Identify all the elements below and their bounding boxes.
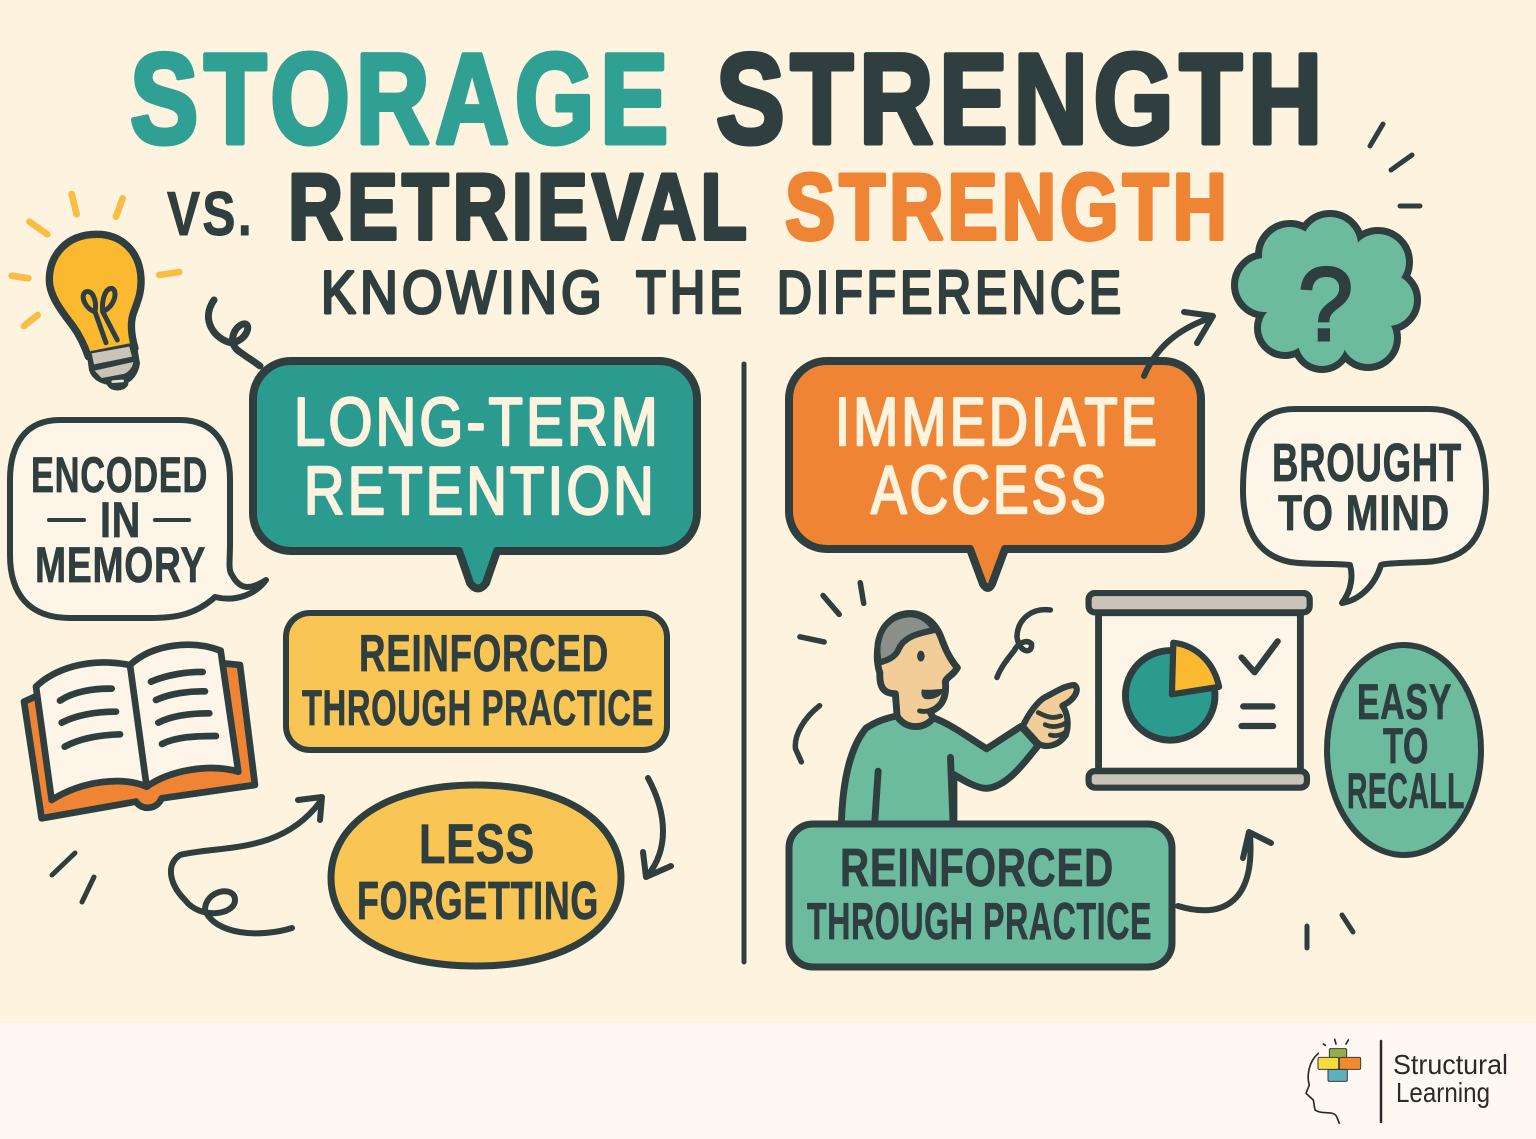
panel: reinforced through practice (green) bbox=[789, 824, 1172, 967]
arrow: practice to recall bbox=[1178, 832, 1271, 910]
icon: open book bbox=[24, 645, 255, 818]
panel: reinforced through practice (yellow): REINFORCED bbox=[359, 625, 609, 683]
callout: brought to mind: TO MIND bbox=[1278, 485, 1450, 541]
icon: light bulb bbox=[12, 194, 179, 389]
icon: presentation screen bbox=[1089, 593, 1310, 788]
panel: reinforced through practice (yellow): THROUGH PRACTICE bbox=[302, 680, 654, 736]
title: THE bbox=[636, 259, 746, 326]
callout: brought to mind bbox=[1243, 409, 1486, 603]
panel: less forgetting bbox=[331, 785, 621, 966]
icon: thought cloud with question mark bbox=[1238, 217, 1414, 366]
title: RETRIEVAL bbox=[288, 154, 751, 259]
panel: immediate access bubble bbox=[789, 361, 1201, 588]
sparks: lower right bbox=[1307, 915, 1353, 948]
sparks: lower left bbox=[52, 853, 94, 902]
title bbox=[130, 28, 1328, 326]
panel: easy to recall: TO bbox=[1383, 718, 1429, 774]
panel: less forgetting: FORGETTING bbox=[357, 871, 599, 931]
title: VS. bbox=[167, 180, 254, 249]
panel: immediate access bubble: ACCESS bbox=[871, 452, 1109, 528]
callout: encoded in memory bbox=[10, 420, 266, 618]
title: STRENGTH bbox=[716, 28, 1328, 171]
logo: Structural Learning: Structural bbox=[1393, 1049, 1508, 1080]
title: KNOWING bbox=[321, 259, 606, 326]
logo: Structural Learning: Learning bbox=[1396, 1077, 1490, 1108]
divider bbox=[742, 364, 746, 962]
panel: long-term retention bubble: RETENTION bbox=[304, 453, 657, 529]
callout: encoded in memory: ENCODED bbox=[31, 447, 208, 503]
callout: encoded in memory: IN bbox=[100, 492, 141, 548]
logo: Structural Learning bbox=[1306, 1039, 1508, 1123]
panel: less forgetting: LESS bbox=[419, 812, 535, 875]
title: DIFFERENCE bbox=[777, 259, 1125, 326]
panel: reinforced through practice (yellow) bbox=[286, 613, 667, 750]
icon: thought cloud with question mark: ? bbox=[1298, 247, 1354, 363]
panel: long-term retention bubble bbox=[253, 361, 697, 588]
title: STORAGE bbox=[130, 28, 674, 171]
arrow: curl to retention bubble bbox=[208, 300, 260, 366]
title: STRENGTH bbox=[785, 154, 1231, 259]
arrow: squiggle to reinforced bbox=[171, 797, 322, 933]
panel: reinforced through practice (green): THROUGH PRACTICE bbox=[807, 893, 1152, 951]
icon: presenter pointing bbox=[795, 583, 1077, 828]
callout: encoded in memory: MEMORY bbox=[35, 537, 206, 593]
sparks: top right bbox=[1370, 124, 1420, 206]
arrow: curved down to less forgetting bbox=[643, 778, 671, 877]
panel: long-term retention bubble: LONG-TERM bbox=[294, 384, 661, 460]
panel: immediate access bubble: IMMEDIATE bbox=[835, 384, 1160, 460]
arrow: immediate access to cloud bbox=[1144, 312, 1213, 376]
panel: easy to recall: EASY bbox=[1357, 674, 1452, 730]
panel: reinforced through practice (green): REINFORCED bbox=[840, 838, 1114, 898]
panel: easy to recall bbox=[1327, 645, 1481, 855]
